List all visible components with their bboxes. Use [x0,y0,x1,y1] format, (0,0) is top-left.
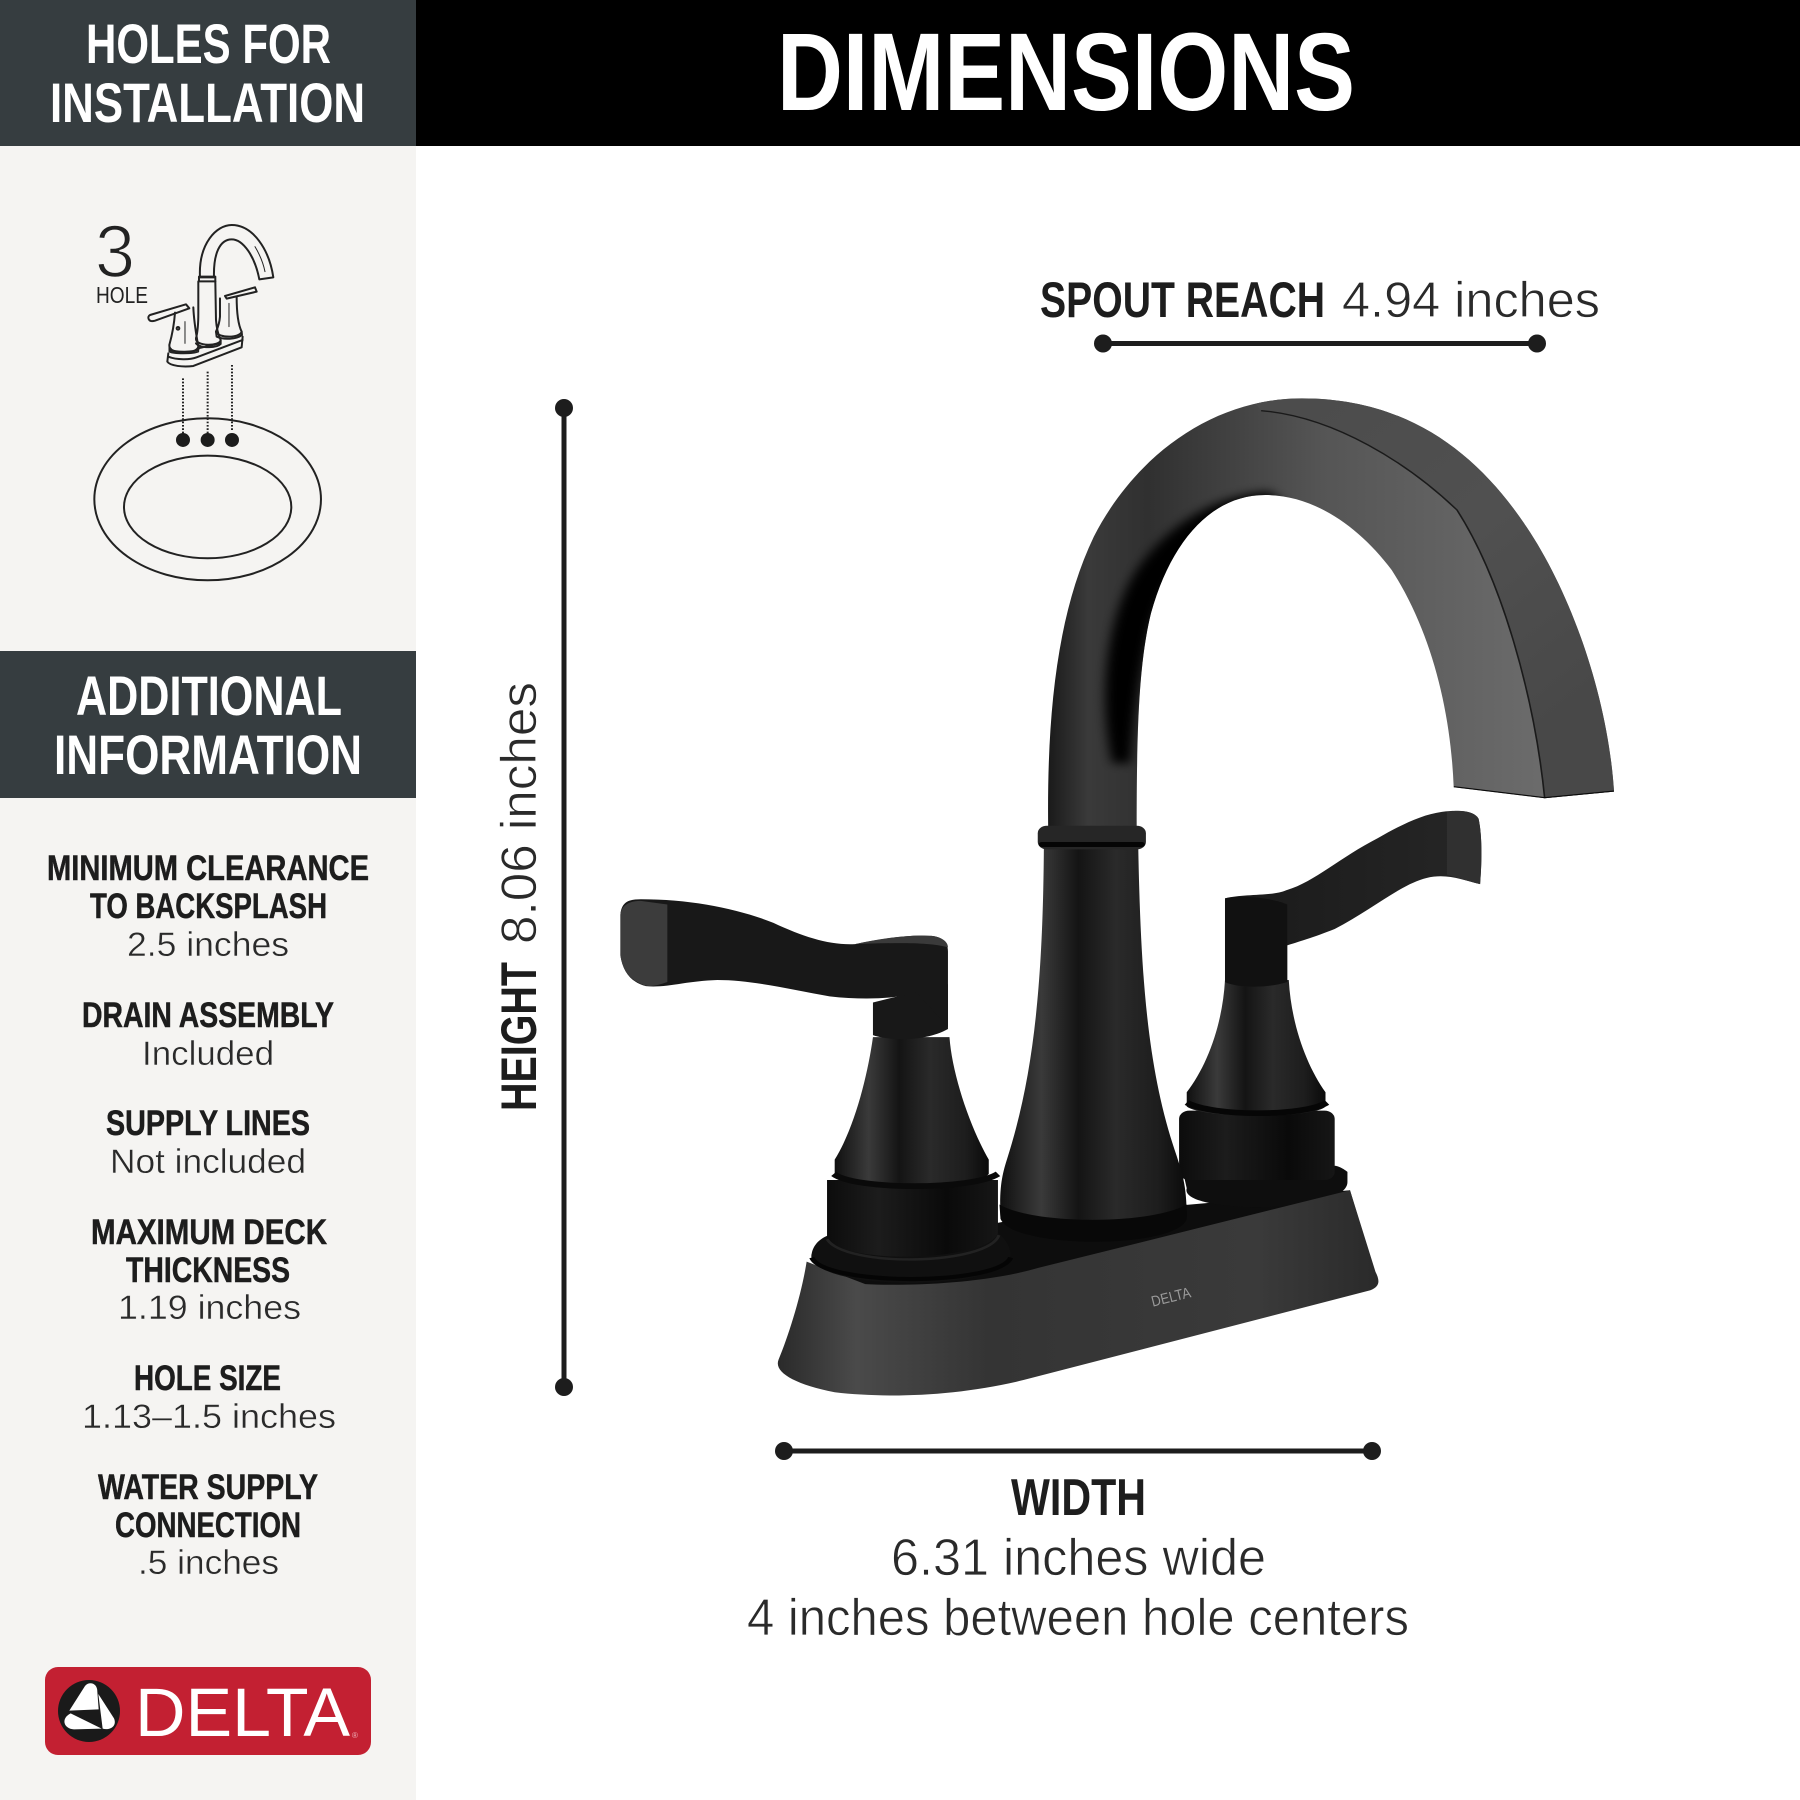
logo: Delta [45,1667,371,1755]
center column [999,826,1187,1242]
title: DIMENSIONS [777,11,1355,134]
heading: additional information: ADDITIONAL [76,664,342,727]
title bar [416,0,1800,146]
heading: additional information: INFORMATION [54,723,362,786]
spec: minimum clearance: 2.5 inches [127,926,289,964]
spout arc [1048,387,1620,827]
base front [778,1190,1378,1395]
icon: three hole faucet and sink diagram [94,210,321,580]
faucet product image [620,387,1620,1395]
label: height: 8.06 inches [491,682,547,944]
label: height: HEIGHT [491,962,547,1111]
deck plate [814,1190,1365,1294]
label: height [491,682,547,1111]
lower faucet body [620,811,1481,1395]
icon: three hole faucet and sink diagram: 3 [95,210,135,293]
spec: water supply connection: WATER SUPPLY [98,1468,318,1507]
spec: minimum clearance [47,849,369,964]
heading: holes for installation: HOLES FOR [86,12,331,75]
spec: hole size: HOLE SIZE [134,1359,281,1398]
label: spout reach: 4.94 inches [1342,272,1600,328]
spec: supply lines [106,1104,310,1181]
spec: drain assembly [82,996,334,1073]
sidebar panel [0,0,416,1800]
base logo text: DELTA [1150,1284,1193,1311]
spec: maximum deck thickness [91,1213,327,1327]
arrow: spout reach dimension line [1094,334,1546,352]
logo: Delta: DELTA [135,1674,350,1751]
spec: minimum clearance: TO BACKSPLASH [90,887,327,926]
spec: supply lines: SUPPLY LINES [106,1104,310,1143]
label: width [747,1469,1409,1647]
label: width: 4 inches between hole centers [747,1589,1409,1647]
spec: maximum deck thickness: THICKNESS [126,1251,290,1290]
spec: hole size [82,1359,336,1436]
label: width: 6.31 inches wide [891,1529,1266,1587]
logo: Delta: ® [352,1731,358,1740]
spec: maximum deck thickness: 1.19 inches [118,1289,301,1327]
spec: water supply connection: .5 inches [138,1544,279,1582]
spec: drain assembly: Included [142,1035,274,1073]
icon: three hole faucet and sink diagram: HOLE [96,282,148,308]
label: spout reach [1040,272,1600,328]
heading: holes for installation: INSTALLATION [50,71,365,134]
spec: water supply connection: CONNECTION [115,1506,301,1545]
heading: holes for installation [0,0,416,146]
spec: minimum clearance: MINIMUM CLEARANCE [47,849,369,888]
spec: supply lines: Not included [110,1143,306,1181]
spec: maximum deck thickness: MAXIMUM DECK [91,1213,327,1252]
heading: additional information [0,651,416,798]
arrow: width dimension line [775,1442,1381,1460]
left handle assembly [620,899,1011,1283]
label: width: WIDTH [1011,1469,1146,1527]
spec: hole size: 1.13–1.5 inches [82,1398,336,1436]
spec: drain assembly: DRAIN ASSEMBLY [82,996,334,1035]
right handle assembly [1179,811,1481,1207]
label: spout reach: SPOUT REACH [1040,272,1325,328]
arrow: height dimension line [555,399,573,1396]
spec: water supply connection [98,1468,318,1582]
